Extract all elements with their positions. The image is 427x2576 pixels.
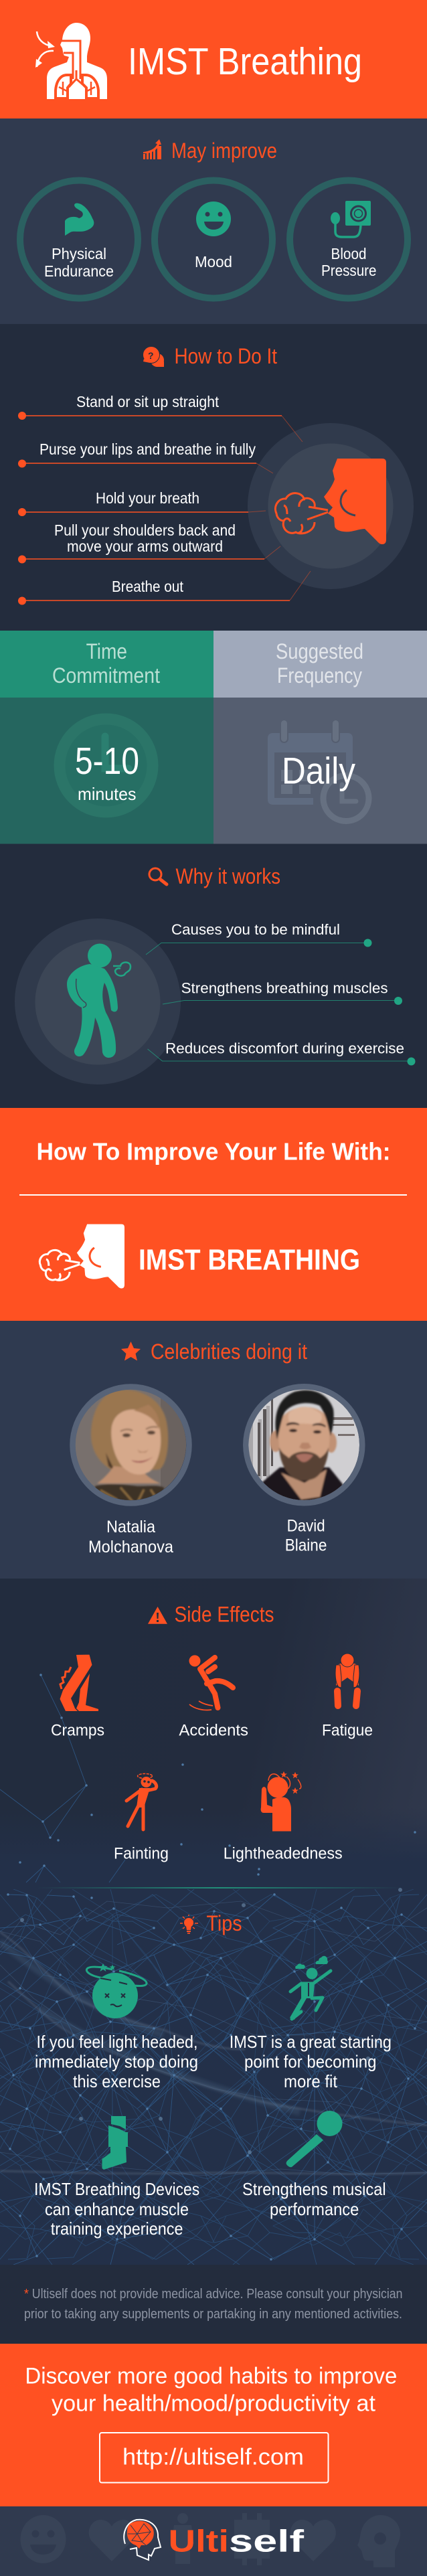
footer: faded background icons xyxy=(20,2513,400,2567)
heading: side effects: Side Effects xyxy=(174,1603,274,1627)
name: natalia molchanova xyxy=(88,1518,173,1556)
icon: dizzy face xyxy=(86,1963,147,2018)
title: IMST Breathing xyxy=(128,40,362,83)
reason: strengthens breathing muscles xyxy=(163,980,402,1005)
panel: how to do it xyxy=(0,324,427,631)
heading: how to do it xyxy=(143,344,277,368)
panel: call to action: Discover more good habits to improve xyxy=(25,2364,397,2389)
tip: stop if light headed xyxy=(35,1963,198,2091)
panel: how to improve banner: How To Improve Your Life With: xyxy=(36,1138,391,1165)
tip: stop if light headed: immediately stop doing xyxy=(35,2052,198,2072)
icon: muscle arm xyxy=(65,203,94,236)
panel: time commitment: Commitment xyxy=(52,663,160,688)
tip: musical performance xyxy=(242,2111,386,2219)
name: natalia molchanova: Molchanova xyxy=(88,1538,173,1556)
panel: time commitment: minutes xyxy=(78,784,137,804)
tip: great starting point xyxy=(230,1956,392,2091)
heading: celebrities doing it: Celebrities doing it xyxy=(151,1340,307,1364)
item: fainting: Fainting xyxy=(114,1845,169,1863)
photo: david blaine xyxy=(243,1384,365,1506)
panel: suggested frequency xyxy=(214,631,427,843)
photo: natalia molchanova xyxy=(70,1384,192,1506)
panel: how to improve banner: IMST BREATHING xyxy=(139,1243,360,1276)
reason: reduces discomfort during exercise: Reduces discomfort during exercise xyxy=(165,1040,404,1057)
reason: reduces discomfort during exercise xyxy=(147,1040,415,1066)
panel: disclaimer xyxy=(0,2265,427,2344)
step: pull your shoulders back: Pull your shoulders back and xyxy=(54,521,236,539)
step: stand or sit up straight xyxy=(18,393,303,442)
step: pull your shoulders back: move your arms outward xyxy=(67,538,223,555)
panel: may improve xyxy=(0,118,427,324)
tip: great starting point: more fit xyxy=(284,2071,338,2091)
icon: tired person xyxy=(335,1654,359,1706)
item: cramps xyxy=(51,1655,104,1740)
item: accidents: Accidents xyxy=(179,1722,248,1740)
tip: breathing devices: IMST Breathing Devices xyxy=(34,2179,199,2199)
panel: network background xyxy=(0,1579,427,2265)
icon: person slipping xyxy=(189,1655,233,1710)
logo: ultiself: Ulti xyxy=(169,2524,229,2559)
tip: breathing devices xyxy=(34,2116,199,2239)
step: hold your breath: Hold your breath xyxy=(96,489,199,507)
item: physical endurance: Physical xyxy=(52,245,106,262)
reason: causes you to be mindful: Causes you to be mindful xyxy=(171,921,340,938)
link box xyxy=(100,2433,328,2482)
item: mood xyxy=(155,181,272,299)
tip: great starting point: point for becoming xyxy=(244,2052,376,2072)
panel: time commitment: Time xyxy=(86,639,127,663)
item: lightheadedness: Lightheadedness xyxy=(224,1845,343,1863)
item: physical endurance: Endurance xyxy=(44,262,114,280)
diagram: circles behind face xyxy=(248,423,414,589)
tip: stop if light headed: this exercise xyxy=(73,2071,161,2091)
item: cramps: Cramps xyxy=(51,1722,104,1740)
reason: causes you to be mindful xyxy=(146,921,372,955)
icon: leg cramp xyxy=(60,1655,98,1711)
step: purse your lips: Purse your lips and breathe in fully xyxy=(39,440,256,458)
panel: header xyxy=(0,0,427,118)
name: david blaine: Blaine xyxy=(285,1536,327,1554)
item: blood pressure: Blood xyxy=(331,245,367,262)
logo: ultiself xyxy=(124,2520,305,2560)
heading: tips: Tips xyxy=(206,1911,242,1935)
panel: time commitment xyxy=(0,631,214,843)
panel: celebrities xyxy=(0,1321,427,1579)
icon: person breathing xyxy=(67,944,131,1058)
icon: calendar and clock xyxy=(268,720,369,821)
step: breathe out: Breathe out xyxy=(112,578,184,595)
heading: why it works: Why it works xyxy=(175,864,280,888)
icon: smiley xyxy=(196,202,231,236)
name: david blaine xyxy=(285,1517,327,1554)
icon: microphone xyxy=(286,2111,343,2167)
item: physical endurance xyxy=(20,181,138,299)
panel: tips xyxy=(34,1911,392,2239)
diagram: circles behind person xyxy=(15,918,181,1084)
heading: how to do it: ? xyxy=(148,350,154,361)
icon: face exhaling, white xyxy=(39,1224,124,1289)
item: accidents xyxy=(179,1655,248,1740)
item: fainting xyxy=(114,1774,169,1863)
step: hold your breath xyxy=(18,489,266,516)
link box: http://ultiself.com xyxy=(122,2445,304,2470)
panel: call to action: your health/mood/productivity at xyxy=(52,2391,376,2417)
tip: stop if light headed: If you feel light headed, xyxy=(36,2032,198,2052)
panel: suggested frequency: Frequency xyxy=(277,663,362,688)
icon: clock xyxy=(60,719,153,812)
icon: fainting person xyxy=(126,1774,157,1830)
panel: suggested frequency: Daily xyxy=(282,750,355,791)
item: fatigue xyxy=(322,1654,373,1740)
logo icon: brain in head xyxy=(124,2520,161,2560)
tip: musical performance: performance xyxy=(270,2199,359,2219)
item: fatigue: Fatigue xyxy=(322,1722,373,1740)
panel: side effects xyxy=(51,1603,373,1863)
panel: how to improve banner xyxy=(0,1108,427,1321)
step: purse your lips xyxy=(18,440,273,473)
panel: call to action xyxy=(0,2344,427,2506)
icon: face exhaling xyxy=(275,459,386,544)
step: stand or sit up straight: Stand or sit up straight xyxy=(76,393,220,410)
panel: footer xyxy=(0,2506,427,2576)
icon: inhaler xyxy=(102,2116,128,2170)
heading: how to do it: How to Do It xyxy=(174,344,277,368)
step: breathe out xyxy=(18,571,311,605)
tip: breathing devices: training experience xyxy=(51,2219,183,2239)
item: blood pressure: Pressure xyxy=(321,262,376,279)
icon: leaping businessman xyxy=(290,1956,331,2020)
tip: breathing devices: can enhance muscle xyxy=(45,2199,189,2219)
item: mood: Mood xyxy=(195,253,232,270)
icon: respiratory system xyxy=(35,23,107,99)
icon: dizzy person xyxy=(261,1771,301,1832)
item: blood pressure xyxy=(290,181,408,299)
logo: ultiself: self xyxy=(229,2524,305,2559)
panel: time commitment: 5-10 xyxy=(75,740,139,783)
reason: strengthens breathing muscles: Strengthens breathing muscles xyxy=(181,980,388,997)
heading: tips xyxy=(180,1911,242,1935)
item: lightheadedness xyxy=(224,1771,343,1863)
name: david blaine: David xyxy=(287,1517,325,1536)
tip: great starting point: IMST is a great starting xyxy=(230,2032,392,2052)
icon: blood pressure monitor xyxy=(331,201,371,237)
panel: suggested frequency: Suggested xyxy=(276,639,363,663)
heading: may improve: May improve xyxy=(171,139,277,163)
name: natalia molchanova: Natalia xyxy=(106,1518,155,1536)
panel: why it works xyxy=(0,843,427,1108)
tip: musical performance: Strengthens musical xyxy=(242,2179,386,2199)
step: pull your shoulders back xyxy=(18,521,280,564)
